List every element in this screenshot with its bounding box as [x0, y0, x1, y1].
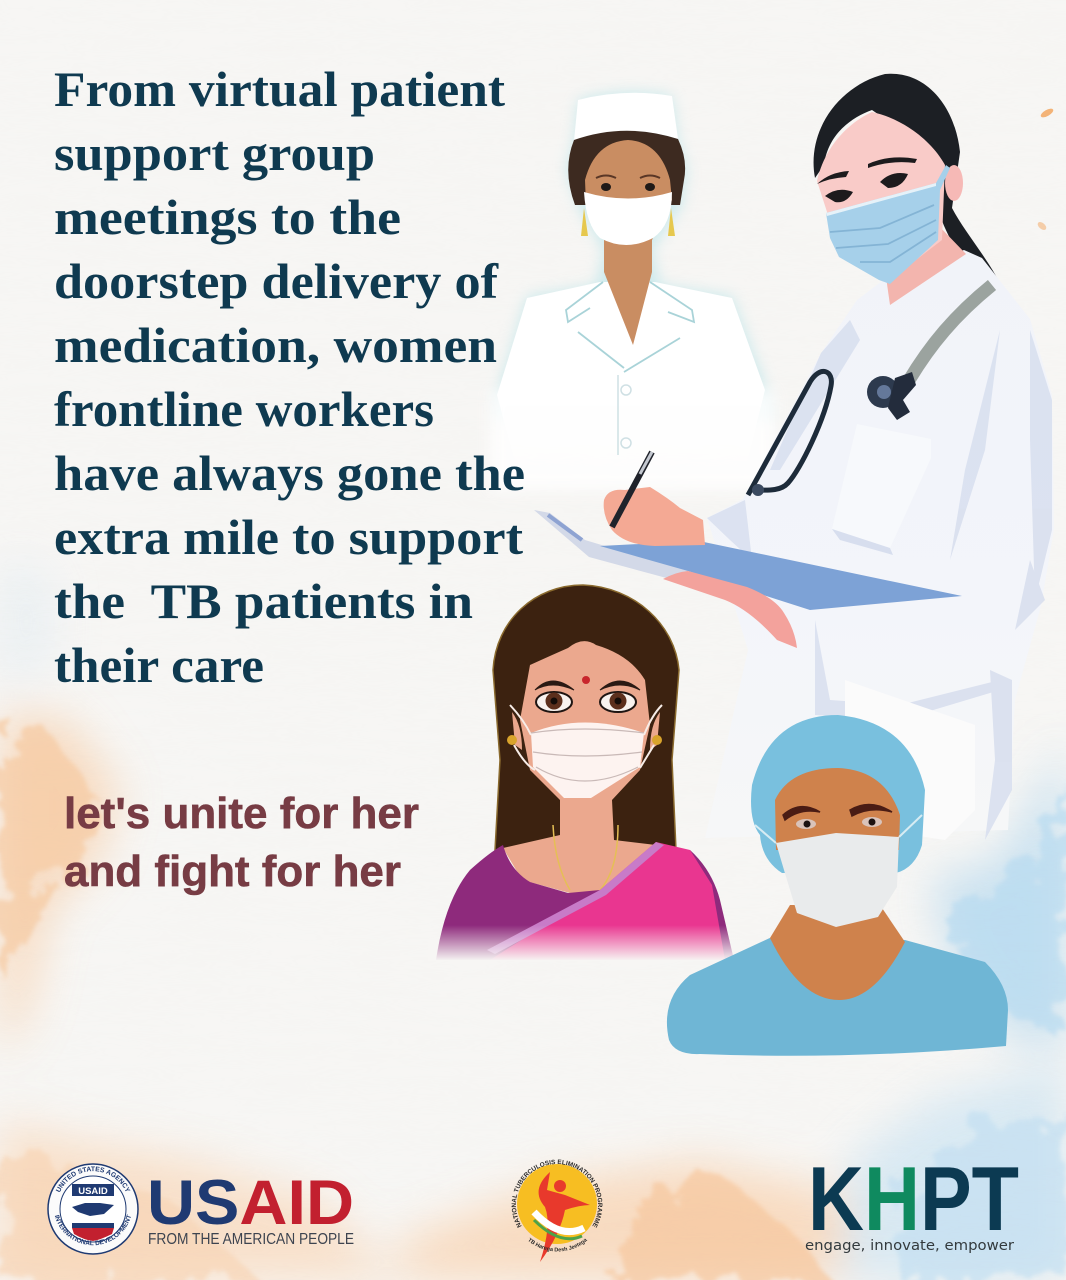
surgeon mask — [776, 833, 899, 927]
saree woman bindi — [582, 676, 590, 684]
doctor neck — [885, 225, 966, 305]
saree woman necklace — [553, 825, 618, 890]
surgeon eyebrows — [783, 804, 892, 820]
title paragraph: From virtual patient — [54, 61, 505, 117]
logo: National TB Elimination Programme: TB Harega Desh Jeetega — [528, 1238, 588, 1252]
illustration: woman in pink saree — [428, 585, 740, 961]
bottom fade — [428, 925, 740, 961]
nurse buttons — [618, 375, 631, 455]
surgeon face — [775, 768, 900, 850]
slogan — [64, 789, 419, 896]
saree woman eyes — [536, 692, 572, 712]
title paragraph: extra mile to support — [54, 509, 523, 565]
doctor eyebrows — [817, 157, 917, 184]
doctor lower hand — [663, 571, 797, 648]
nurse earrings — [581, 208, 675, 236]
nurse hair — [568, 131, 685, 205]
doctor ponytail and hair — [814, 74, 1008, 300]
doctor stethoscope — [908, 285, 992, 382]
saree woman ears and earrings — [512, 712, 660, 750]
doctor coat — [705, 250, 1054, 838]
logo: USAID wordmark: USAID — [147, 1168, 354, 1238]
saree woman mask — [531, 722, 644, 798]
doctor paper sheet — [845, 680, 975, 840]
illustration: surgeon in blue cap — [667, 715, 1008, 1056]
slogan: let's unite for her — [64, 789, 419, 838]
doctor writing hand — [604, 487, 705, 546]
surgeon eyes — [796, 819, 816, 829]
title paragraph: meetings to the — [54, 189, 401, 245]
logo: National TB Elimination Programme: NATIONAL TUBERCULOSIS ELIMINATION PROGRAMME — [512, 1160, 602, 1228]
slogan: and fight for her — [64, 847, 401, 896]
illustration: doctor with clipboard — [534, 74, 1054, 840]
logo: USAID seal: UNITED STATES AGENCY — [56, 1166, 130, 1192]
icon: orange paint flecks — [1036, 107, 1055, 232]
saree woman face and neck — [503, 641, 656, 893]
logo: USAID seal: USAID — [78, 1186, 108, 1197]
logo: National TB Elimination Programme — [512, 1160, 602, 1262]
surgeon neck — [770, 905, 905, 1000]
title paragraph — [54, 61, 525, 693]
logo: USAID wordmark: FROM THE AMERICAN PEOPLE — [148, 1231, 354, 1248]
doctor ear — [945, 165, 963, 201]
saree woman hair — [493, 585, 679, 850]
title paragraph: frontline workers — [54, 381, 434, 437]
nurse mask — [584, 192, 672, 245]
doctor mask — [826, 165, 950, 284]
nurse eyes — [601, 183, 655, 191]
illustration: nurse in white cap — [490, 92, 775, 490]
surgeon body — [667, 936, 1008, 1056]
saree woman eyebrows — [535, 681, 640, 690]
title paragraph: have always gone the — [54, 445, 525, 501]
logo: USAID seal: INTERNATIONAL DEVELOPMENT — [54, 1214, 131, 1246]
logo: USAID seal — [47, 1163, 139, 1255]
doctor pocket — [832, 424, 931, 548]
title paragraph: support group — [54, 125, 375, 181]
nurse face and neck — [585, 140, 672, 345]
doctor pen — [612, 452, 652, 527]
saree woman pink drape — [490, 842, 725, 960]
doctor clipboard — [534, 510, 688, 583]
doctor coat shading — [707, 320, 1052, 840]
doctor face — [817, 112, 945, 280]
surgeon cap — [751, 715, 925, 873]
doctor eyes — [825, 173, 908, 202]
title paragraph: doorstep delivery of — [54, 253, 499, 309]
watercolor splashes — [0, 560, 1066, 1280]
title paragraph: their care — [54, 637, 264, 693]
saree woman blouse — [436, 845, 600, 960]
nurse collar lines — [566, 282, 694, 372]
title paragraph: medication, women — [54, 317, 497, 373]
logo: KHPT: KHPT — [808, 1149, 1019, 1250]
logo: KHPT: engage, innovate, empower — [805, 1238, 1014, 1254]
title paragraph: the TB patients in — [54, 573, 473, 629]
nurse cap — [574, 93, 678, 141]
